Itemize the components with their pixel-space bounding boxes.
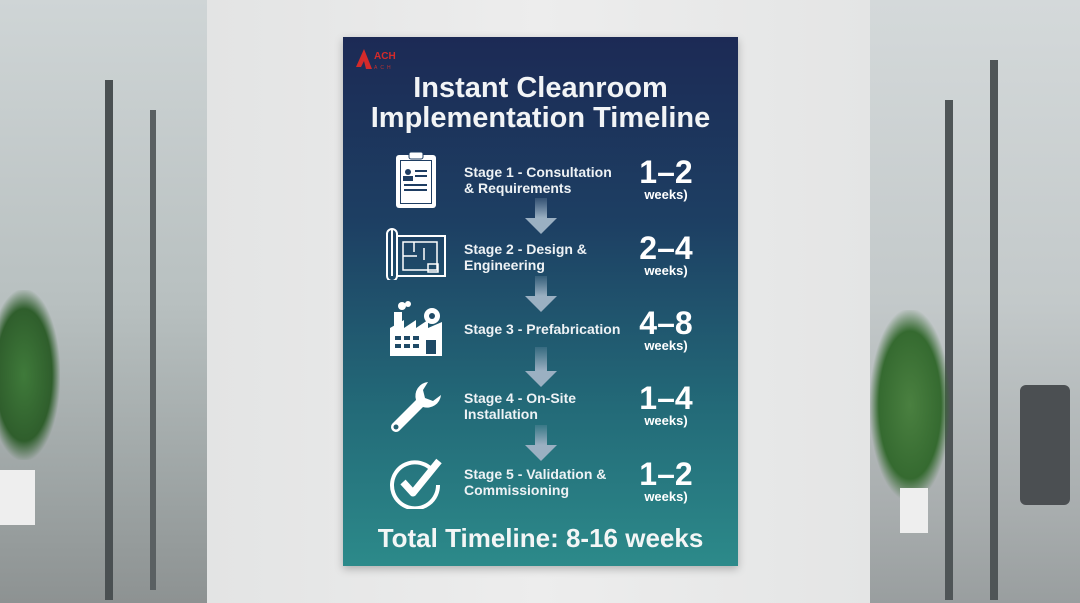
stage 3 text: Stage 3 - Prefabrication <box>464 321 620 337</box>
plant left <box>0 290 60 460</box>
stage 1 text: & Requirements <box>464 180 571 196</box>
title: Instant Cleanroom <box>413 72 668 104</box>
stage 1 duration: weeks) <box>644 187 688 202</box>
background: wall <box>207 0 870 603</box>
logo: ACH <box>374 51 396 62</box>
stage 2 text: Engineering <box>464 257 545 273</box>
stage 2 duration: weeks) <box>644 263 688 278</box>
icon: wrench <box>391 382 441 432</box>
icon: blueprint <box>386 228 446 280</box>
stage 2 text <box>464 241 587 273</box>
icon: clipboard <box>396 152 436 208</box>
title: Implementation Timeline <box>371 102 710 134</box>
stage 5 text: Commissioning <box>464 482 569 498</box>
stage 2 duration: 2–4 <box>639 230 693 266</box>
stage 5 duration: 1–2 <box>639 456 693 492</box>
plant right <box>870 310 950 500</box>
arrow 1 <box>525 198 557 234</box>
stage 5 text <box>464 466 606 498</box>
arrow 2 <box>525 276 557 312</box>
logo: ACH <box>374 65 394 71</box>
stage 4 text: Installation <box>464 406 538 422</box>
icon: check circle <box>390 458 442 509</box>
stage 4 text <box>464 390 576 422</box>
stage 3 duration: 4–8 <box>639 305 693 341</box>
arrow 3 <box>525 347 557 387</box>
background: right office <box>870 0 1080 603</box>
poster <box>343 37 738 566</box>
stage 1 text <box>464 164 612 196</box>
stage 4 duration: weeks) <box>644 413 688 428</box>
stage 5 duration: weeks) <box>644 489 688 504</box>
stage 2 text: Stage 2 - Design & <box>464 241 587 257</box>
stage 1 text: Stage 1 - Consultation <box>464 164 612 180</box>
stage 3 duration: weeks) <box>644 338 688 353</box>
stage 1 duration: 1–2 <box>639 154 693 190</box>
background: left office <box>0 0 207 603</box>
stage 5 text: Stage 5 - Validation & <box>464 466 606 482</box>
arrow 4 <box>525 425 557 461</box>
logo <box>356 49 396 71</box>
total timeline: Total Timeline: 8-16 weeks <box>378 523 703 553</box>
stage 4 duration: 1–4 <box>639 380 693 416</box>
stage 4 text: Stage 4 - On-Site <box>464 390 576 406</box>
title <box>371 72 710 134</box>
icon: factory <box>390 301 442 356</box>
